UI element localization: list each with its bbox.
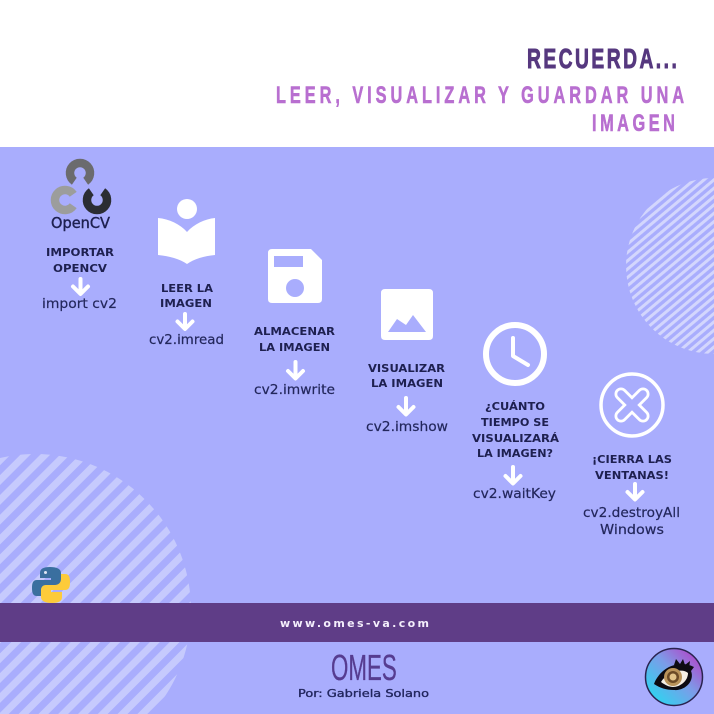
step label: LEER LA xyxy=(161,282,213,295)
step 4: show image xyxy=(366,289,448,435)
step label: VISUALIZARÁ xyxy=(472,432,560,445)
footer bar xyxy=(0,603,714,642)
code xyxy=(583,505,680,538)
icon: OpenCV logo: OpenCV xyxy=(51,214,111,232)
arrow xyxy=(398,398,414,414)
step label: OPENCV xyxy=(53,262,108,275)
step label xyxy=(472,400,560,460)
step 1: import OpenCV xyxy=(42,163,117,312)
arrow xyxy=(628,484,642,500)
step 5: wait time xyxy=(472,325,560,502)
step label: TIEMPO SE xyxy=(481,416,549,429)
step label xyxy=(160,282,213,310)
icon: open book xyxy=(158,199,215,264)
logo: eye badge xyxy=(646,648,702,706)
icon: picture xyxy=(381,289,433,340)
step label: VISUALIZAR xyxy=(368,362,446,375)
code: cv2.waitKey xyxy=(473,486,556,502)
striped circle: right xyxy=(626,178,714,354)
main lilac panel xyxy=(0,147,714,714)
step label: VENTANAS! xyxy=(595,469,669,482)
arrow xyxy=(178,314,192,329)
step 2: read image xyxy=(149,199,224,348)
step label: ¡CIERRA LAS xyxy=(592,453,672,466)
step 6: close windows xyxy=(583,374,680,538)
icon: OpenCV logo xyxy=(51,163,111,232)
code: Windows xyxy=(600,522,664,538)
step label: LA IMAGEN xyxy=(259,341,330,354)
step label xyxy=(368,362,446,390)
step label xyxy=(592,453,672,482)
step 3: store image xyxy=(254,249,336,398)
code: cv2.destroyAll xyxy=(583,505,680,521)
icon: floppy disk xyxy=(268,249,322,303)
arrow xyxy=(506,467,520,484)
step label xyxy=(254,325,336,354)
step label: ALMACENAR xyxy=(254,325,336,338)
brand name: OMES xyxy=(331,649,397,688)
subtitle: LEER, VISUALIZAR Y GUARDAR UNA xyxy=(276,82,684,109)
header panel xyxy=(0,0,714,147)
arrow xyxy=(288,362,303,378)
title: RECUERDA... xyxy=(527,45,677,75)
code: cv2.imwrite xyxy=(254,382,335,398)
author: Por: Gabriela Solano xyxy=(298,687,429,700)
step label xyxy=(46,246,115,275)
website url: www.omes-va.com xyxy=(280,617,429,630)
step label: LA IMAGEN? xyxy=(477,447,553,460)
arrow xyxy=(73,279,88,294)
step label: ¿CUÁNTO xyxy=(485,400,545,413)
striped circle: bottom left xyxy=(0,454,191,714)
code: import cv2 xyxy=(42,296,117,312)
code: cv2.imshow xyxy=(366,419,448,435)
step label: LA IMAGEN xyxy=(371,377,443,390)
code: cv2.imread xyxy=(149,332,224,348)
step label: IMAGEN xyxy=(160,297,212,310)
subtitle xyxy=(276,82,684,137)
icon: Python logo xyxy=(32,567,70,603)
subtitle: IMAGEN xyxy=(592,110,675,137)
icon: close circle xyxy=(601,374,663,436)
step label: IMPORTAR xyxy=(46,246,115,259)
icon: clock xyxy=(486,325,544,383)
